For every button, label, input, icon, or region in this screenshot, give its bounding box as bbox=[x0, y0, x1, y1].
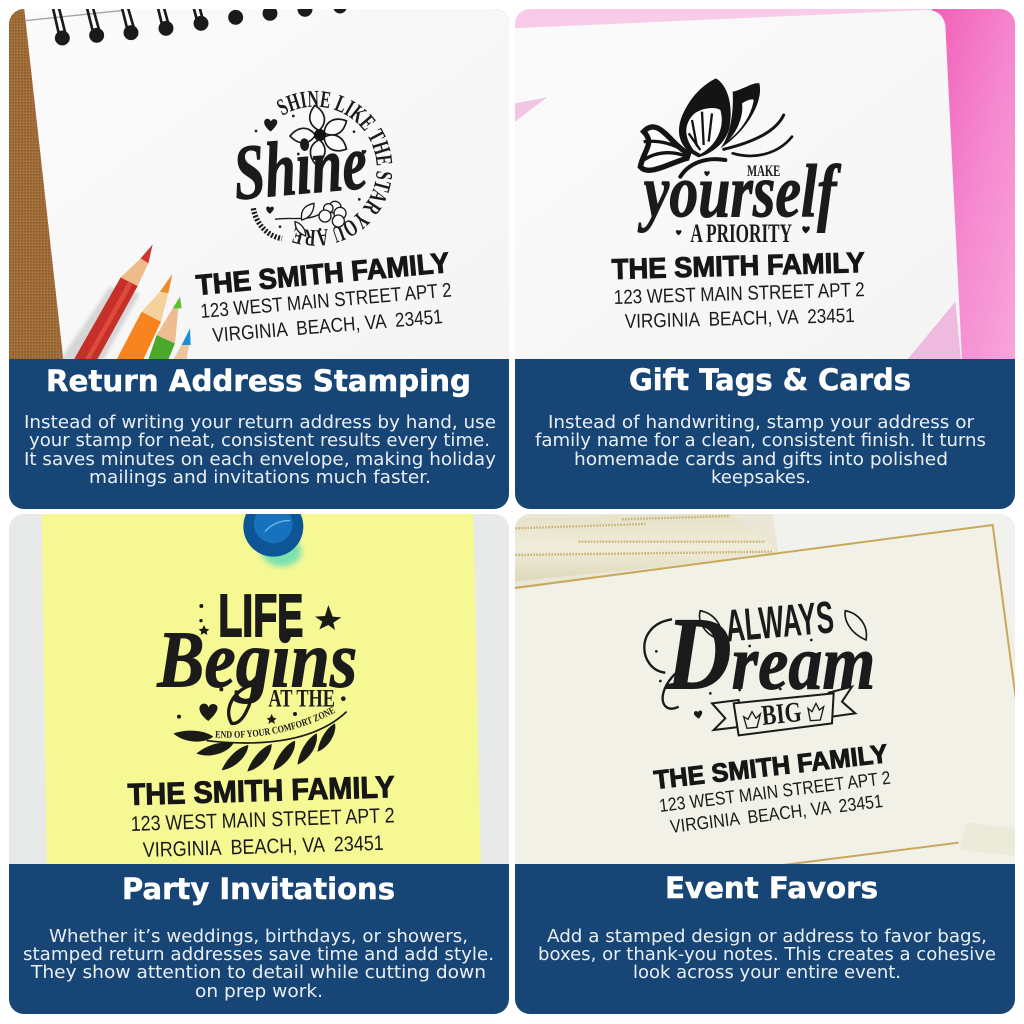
stamp: life begins: END OF YOUR COMFORT ZONE bbox=[215, 706, 336, 738]
stamp: life begins bbox=[156, 594, 356, 772]
caption box bbox=[9, 864, 509, 1014]
script word begins: Begins bbox=[156, 617, 357, 705]
photo: sticky note with pin bbox=[9, 514, 509, 864]
clear tape bbox=[959, 822, 1022, 857]
photo: notebook with pencils bbox=[9, 9, 509, 359]
address: the smith family bbox=[127, 776, 395, 857]
address: the smith family: VIRGINIA BEACH, VA 23451 bbox=[212, 306, 444, 347]
panel: event favors bbox=[512, 510, 1022, 1014]
flower bbox=[290, 104, 350, 166]
spiral binding bbox=[52, 9, 346, 46]
address: the smith family bbox=[652, 738, 892, 837]
body text: They show attention to detail while cutting down bbox=[30, 963, 486, 983]
hearts and dots bbox=[255, 115, 366, 231]
stem flower bbox=[275, 201, 346, 236]
word always: ALWAYS bbox=[723, 591, 836, 652]
body text: family name for a clean, consistent finish. It turns bbox=[535, 431, 986, 451]
body text bbox=[23, 927, 494, 1002]
address: the smith family: 123 WEST MAIN STREET APT 2 bbox=[613, 279, 865, 309]
address: the smith family: THE SMITH FAMILY bbox=[127, 770, 395, 812]
notebook page bbox=[24, 7, 513, 360]
word big: BIG bbox=[760, 696, 803, 732]
curved tagline bbox=[215, 712, 337, 738]
address: the smith family bbox=[611, 252, 865, 328]
body text: Whether it’s weddings, birthdays, or showers, bbox=[49, 927, 468, 947]
swash bbox=[644, 619, 685, 709]
address: the smith family: THE SMITH FAMILY bbox=[652, 738, 889, 795]
pencil shadow bbox=[60, 287, 140, 360]
address: the smith family: THE SMITH FAMILY bbox=[611, 247, 865, 286]
heading: Return Address Stamping bbox=[46, 364, 471, 398]
stamp: make yourself a priority bbox=[637, 78, 842, 248]
address: the smith family bbox=[195, 247, 453, 347]
caption box bbox=[9, 359, 509, 509]
address: the smith family: THE SMITH FAMILY bbox=[195, 247, 451, 302]
body text: look across your entire event. bbox=[633, 963, 901, 983]
panel: return address stamping bbox=[9, 9, 509, 509]
body text: It saves minutes on each envelope, making holiday bbox=[24, 450, 496, 470]
script word Shine: Shine bbox=[230, 118, 370, 216]
body text bbox=[24, 413, 496, 488]
gold border bbox=[512, 525, 1016, 866]
heading: Party Invitations bbox=[122, 872, 395, 906]
banner bbox=[712, 687, 855, 735]
heading: Event Favors bbox=[665, 871, 878, 905]
heading: Gift Tags & Cards bbox=[629, 363, 911, 397]
body text: on prep work. bbox=[195, 982, 323, 1002]
tagline a priority: A PRIORITY bbox=[690, 219, 792, 248]
leaves bbox=[700, 611, 866, 640]
body text: boxes, or thank-you notes. This creates a cohesive bbox=[538, 945, 996, 965]
body text: your stamp for neat, consistent results every time. bbox=[29, 431, 490, 451]
body text: Instead of writing your return address by hand, use bbox=[24, 413, 496, 433]
crowns bbox=[744, 703, 824, 728]
body text: Instead of handwriting, stamp your address or bbox=[548, 413, 975, 433]
body text: keepsakes. bbox=[711, 468, 811, 488]
body text bbox=[538, 927, 996, 983]
leaf branch bbox=[173, 712, 347, 775]
stamp: shine design bbox=[236, 90, 392, 246]
address: the smith family: 123 WEST MAIN STREET APT 2 bbox=[658, 767, 892, 816]
push pin bbox=[243, 514, 306, 570]
panel: party invitations bbox=[9, 514, 509, 1014]
address: the smith family: 123 WEST MAIN STREET APT 2 bbox=[130, 804, 395, 836]
address: the smith family: VIRGINIA BEACH, VA 23451 bbox=[669, 790, 884, 837]
address: the smith family: VIRGINIA BEACH, VA 23451 bbox=[625, 305, 855, 333]
address: the smith family: VIRGINIA BEACH, VA 23451 bbox=[142, 832, 384, 862]
pencils bbox=[74, 244, 191, 359]
caption box bbox=[515, 359, 1015, 509]
stars and dots bbox=[177, 604, 346, 724]
small word make: MAKE bbox=[747, 163, 780, 180]
body text: mailings and invitations much faster. bbox=[89, 468, 431, 488]
photo: gold-border card with ribbon bbox=[512, 510, 1022, 867]
script word yourself: yourself bbox=[637, 151, 842, 234]
at the: AT THE bbox=[268, 685, 335, 713]
panel: gift tags and cards bbox=[512, 7, 1022, 509]
word life: LIFE bbox=[218, 582, 303, 649]
heart and dots bbox=[655, 639, 845, 719]
photo: white card on pink bbox=[512, 7, 1022, 360]
address: the smith family: 123 WEST MAIN STREET APT 2 bbox=[200, 280, 453, 323]
caption box bbox=[515, 864, 1015, 1014]
ribbon bbox=[512, 513, 777, 582]
butterfly bbox=[640, 78, 792, 177]
circular text: SHINE LIKE THE STAR YOU ARE bbox=[276, 90, 392, 246]
body text: Add a stamped design or address to favor bags, bbox=[547, 927, 987, 947]
laurel bbox=[253, 208, 282, 239]
body text: homemade cards and gifts into polished bbox=[574, 450, 948, 470]
body text: stamped return addresses save time and add style. bbox=[23, 945, 494, 965]
body text bbox=[535, 413, 986, 488]
script word dream: Dream bbox=[665, 597, 875, 711]
stamp: always dream big bbox=[644, 591, 875, 735]
